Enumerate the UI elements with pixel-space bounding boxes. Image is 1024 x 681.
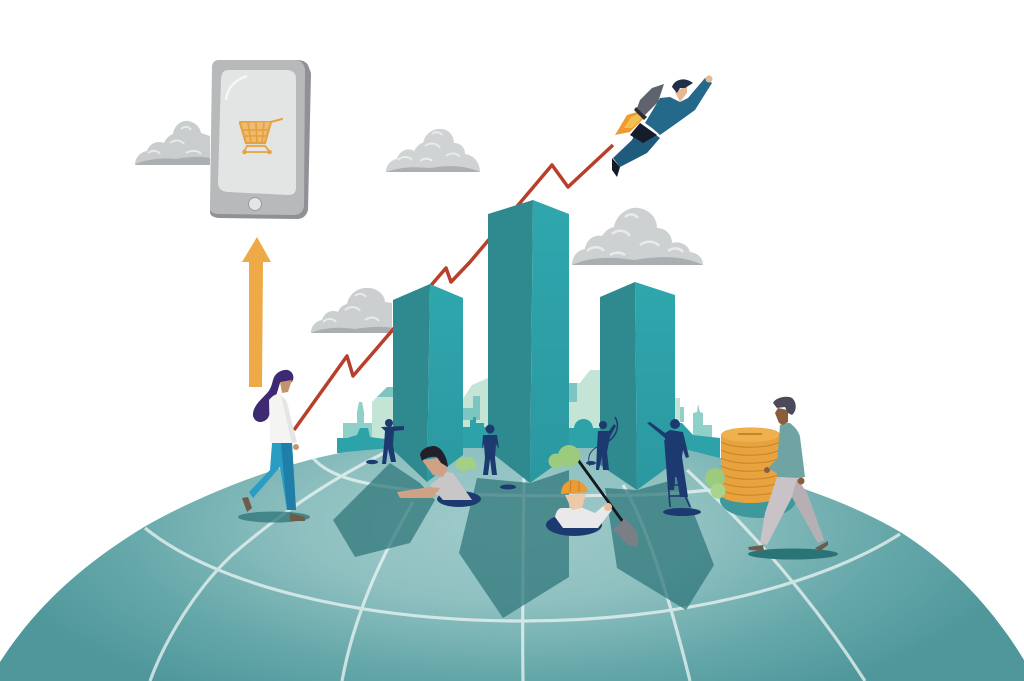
shovel: [578, 460, 623, 522]
face: [280, 380, 292, 393]
rocket: [637, 84, 664, 115]
cloud: right of centre tower: [572, 208, 703, 265]
screen glare: [226, 76, 247, 100]
green bushes: [705, 468, 725, 488]
figure: woman walking: [238, 370, 310, 522]
skyline far right: [675, 398, 720, 460]
torso: [777, 423, 805, 478]
figure: man in manhole reaching: [397, 446, 481, 507]
fist: [706, 76, 712, 82]
shoes: [748, 545, 764, 551]
bar: left tower: [393, 284, 463, 482]
silhouette: worker with bow: [586, 417, 617, 470]
home button: [248, 198, 262, 210]
globe: [0, 448, 1024, 681]
skyline middle: [462, 378, 488, 452]
hair: [773, 397, 796, 415]
cloud: upper left: [135, 121, 210, 165]
ground shadow: [748, 548, 838, 560]
ground shadow: [238, 512, 310, 522]
hair: [253, 370, 293, 422]
cloud: top centre: [386, 129, 480, 172]
shadow: right tower: [605, 478, 714, 610]
torso: [269, 393, 295, 443]
flame: [615, 112, 645, 135]
bar: centre tower: [488, 200, 569, 483]
helmet: [561, 480, 588, 494]
icon: green bush by tower: [456, 457, 476, 471]
shoes: [242, 497, 252, 512]
shadow: centre tower: [459, 470, 569, 618]
icon: green bush by shovel: [548, 445, 580, 468]
ladder: [665, 440, 690, 507]
icon: smartphone with shopping cart: [210, 60, 311, 219]
bar: right tower: [600, 282, 675, 490]
skyline right of centre: [569, 370, 600, 450]
suit body: [645, 78, 712, 135]
coin stack: [721, 428, 780, 503]
silhouette: worker on ladder: [647, 419, 701, 516]
legs: [760, 477, 824, 545]
shoes: [612, 158, 620, 177]
hair: [672, 79, 693, 93]
icon: shopping cart: [240, 119, 282, 154]
head: [775, 408, 788, 425]
phone screen: [218, 70, 296, 195]
red growth line: [294, 145, 613, 430]
figure: man carrying coin stack: [705, 397, 838, 560]
legs: [249, 443, 296, 510]
silhouette: worker with telescope: [366, 419, 404, 464]
shadow: left tower: [333, 463, 435, 557]
figure: digger with helmet and shovel: [546, 460, 638, 547]
skyline left: [337, 387, 393, 453]
hand: [798, 478, 804, 484]
figure: businessman with jetpack: [612, 76, 712, 177]
face: [675, 85, 687, 102]
silhouette: standing worker: [482, 424, 516, 490]
arrow: upward orange: [242, 237, 271, 387]
briefcase: [630, 123, 657, 143]
legs: [613, 123, 660, 167]
globe grid lines: [145, 453, 900, 681]
cloud: left of left tower: [311, 288, 393, 333]
